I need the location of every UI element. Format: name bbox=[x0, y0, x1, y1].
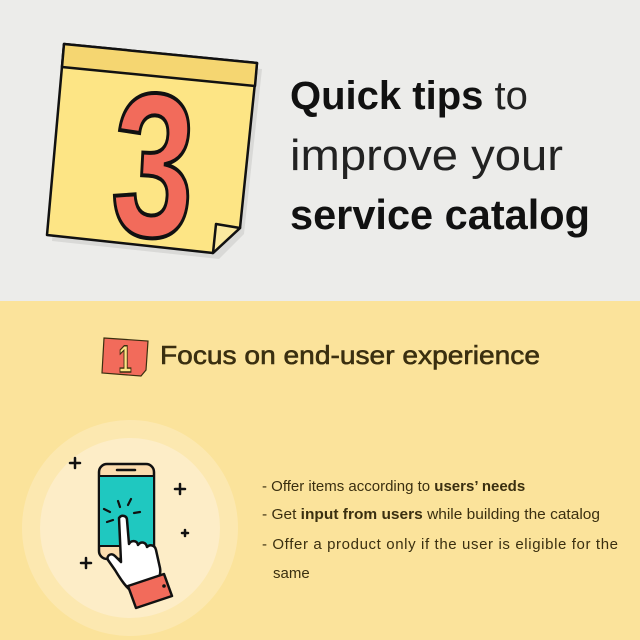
title: Quick tips to bbox=[290, 74, 528, 118]
icon: sticky note with 3 bbox=[47, 44, 262, 282]
heading: focus on end-user experience: 1 bbox=[118, 337, 132, 380]
bullet list bbox=[262, 478, 618, 582]
title: improve your bbox=[290, 131, 563, 180]
title: service catalog bbox=[290, 191, 590, 238]
heading: focus on end-user experience bbox=[102, 337, 540, 380]
bullet list: - Offer items according to users’ needs bbox=[262, 478, 525, 495]
icon: sticky note with 3: 3 bbox=[107, 48, 201, 282]
icon: phone touch illustration bbox=[22, 420, 238, 636]
bullet list: - Get input from users while building the catalog bbox=[262, 506, 600, 523]
bullet list: same bbox=[273, 565, 310, 582]
heading: focus on end-user experience: Focus on end-user experience bbox=[160, 340, 540, 370]
title bbox=[290, 74, 590, 238]
bullet list: - Offer a product only if the user is eligible for the bbox=[262, 536, 618, 553]
